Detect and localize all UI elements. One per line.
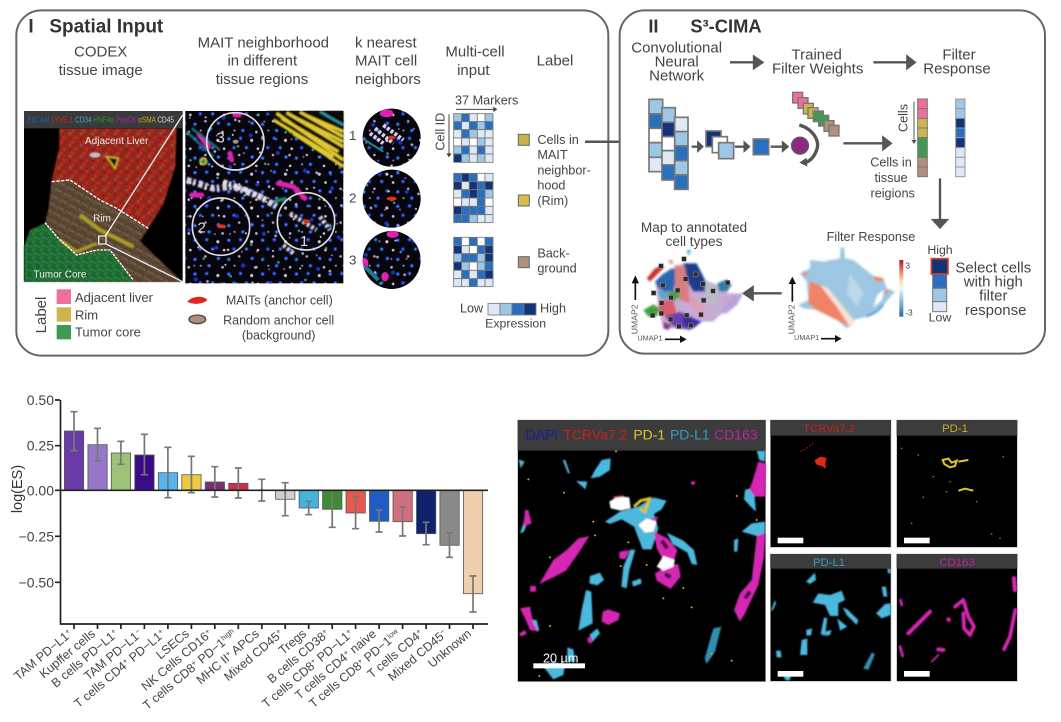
legend: anchor cell: MAITs (anchor cell) [226, 293, 333, 307]
heading: filter response: Filter [942, 47, 976, 64]
x axis category labels: T cells CD4 [71, 659, 129, 711]
legend: region label: Label [33, 297, 50, 333]
x axis category labels: MHC II [194, 652, 232, 687]
expression legend: Expression [485, 316, 546, 330]
high low selection stack [927, 243, 953, 325]
axes [55, 400, 488, 629]
heading: filter response: Response [923, 61, 991, 78]
zoom box and lines [99, 115, 183, 282]
heading: convolutional neural network: Network [649, 68, 705, 85]
x axis category labels: − [133, 626, 142, 636]
cells in tissue regions text: tissue [874, 171, 908, 185]
output square [753, 139, 769, 155]
select cells text: filter [979, 288, 1007, 305]
cells in tissue regions text: reigions [870, 186, 915, 200]
bar chart: log(ES) by cell type [10, 392, 488, 713]
heading: CODEX tissue image: tissue image [59, 62, 143, 79]
cell id axis: Cell ID [434, 113, 448, 151]
x axis category labels: + [203, 626, 212, 636]
PD-1 image: PD-1 [942, 423, 968, 435]
filter response map [798, 230, 915, 328]
neighborhood numbers: 2 [197, 220, 206, 237]
UMAP axes left: UMAP2 [629, 304, 639, 334]
tissue region labels: Tumor Core [34, 269, 87, 280]
UMAP axes right [786, 277, 842, 342]
heading: k nearest neighbors: MAIT cell [355, 53, 417, 70]
merged header [518, 420, 766, 451]
high low selection stack: High [927, 243, 953, 257]
output labels: ground [537, 262, 577, 276]
matrix 1 [454, 114, 493, 162]
response column [956, 99, 965, 177]
x axis category labels: + [223, 648, 233, 658]
annotated cell type map [641, 220, 747, 330]
cells in tissue regions text: Cells in [870, 156, 912, 170]
arrow: network to weights [730, 57, 762, 68]
heading: label: Label [537, 53, 573, 70]
legend: region label [33, 289, 154, 339]
cells axis: Cells [896, 104, 910, 132]
neighborhood numbers: 3 [216, 130, 225, 147]
merged channel legend: TCRVa7.2 [563, 426, 628, 442]
neighborhood circles [192, 113, 335, 255]
heading: MAIT neighborhood: tissue regions [216, 71, 308, 88]
neighbor crop 3 [362, 230, 422, 290]
expression legend: High [540, 302, 566, 316]
x axis category labels: low [385, 626, 400, 641]
tissue marker legend: EbCAM LYVE-1 CD34 HNF4α PanCK αSMA CD45 [27, 115, 174, 125]
high low selection stack: Low [929, 311, 951, 325]
white overlaps [609, 496, 675, 571]
heading: trained filter weights: Trained [792, 47, 842, 64]
row numbers: 1 [349, 128, 356, 143]
annotated cell type map: Map to annotated [641, 220, 747, 235]
x axis category labels: T cells CD8 [259, 659, 317, 711]
x axis category labels: LSECs [153, 627, 192, 662]
cells axis [896, 102, 917, 144]
x axis category labels: + [156, 626, 165, 636]
x axis category labels: + [344, 626, 353, 636]
x axis category labels: + [120, 656, 130, 666]
heading: multi-cell input: Multi-cell [445, 44, 505, 61]
heading: MAIT neighborhood: in different [227, 53, 298, 70]
heading: multi-cell input: input [457, 62, 490, 79]
CD163 image [897, 554, 1017, 681]
neighborhood image [185, 111, 343, 283]
select cells text: Select cells [955, 260, 1031, 277]
x axis category labels [11, 626, 474, 713]
panel: S3-CIMA [620, 10, 1045, 354]
arrow: filter to cells [843, 138, 891, 149]
heading: S3-CIMA: II [648, 15, 659, 36]
x axis category labels: Tregs [276, 627, 309, 657]
select cells text: with high [963, 274, 1023, 291]
y axis tick labels: 0.00 [27, 482, 54, 498]
trained filter squares [793, 92, 839, 136]
x axis category labels: + [414, 626, 423, 636]
filter response map: 3 [905, 260, 910, 270]
tissue region labels: Rim [93, 214, 111, 225]
heading: MAIT neighborhood: MAIT neighborhood [198, 34, 329, 51]
TCRVa7.2 image: TCRVa7.2 [803, 423, 855, 435]
merged channel legend: PD-1 [633, 426, 665, 442]
heading: S3-CIMA: S³-CIMA [690, 15, 762, 36]
y axis tick labels: −0.25 [19, 528, 54, 544]
magenta CD163 structures [519, 462, 766, 643]
network layers [649, 99, 688, 189]
annotated cell type map: cell types [666, 234, 723, 249]
UMAP axes left: UMAP1 [637, 334, 663, 343]
x axis category labels: APCs [227, 627, 262, 659]
colorbar [899, 260, 903, 317]
markers axis: 37 Markers [455, 94, 518, 108]
x axis category labels: + [274, 626, 283, 636]
x axis category labels: Mixed CD45 [221, 629, 283, 684]
neighbor crop 1 [362, 108, 422, 168]
matrix 2 [454, 173, 493, 223]
legend: anchor cell: (background) [242, 329, 315, 343]
output labels: MAIT [537, 148, 568, 162]
panel: spatial input [16, 10, 608, 356]
filter response map: -3 [905, 307, 913, 317]
x axis category labels: − [438, 626, 447, 636]
merged scale bar: 20 µm [543, 651, 578, 665]
x axis category labels: naive [345, 627, 379, 659]
TCRVa7.2 image [770, 420, 891, 547]
fluorescence microscopy panels [518, 420, 1017, 682]
x axis category labels: PD−1 [192, 636, 228, 669]
neighborhood numbers: 1 [300, 233, 308, 250]
anchor cells [217, 140, 310, 228]
output labels: Cells in [537, 133, 579, 147]
heading: spatial input: Spatial Input [49, 16, 164, 37]
UMAP axes right: UMAP1 [794, 333, 819, 342]
PD-L1 image [770, 554, 891, 681]
legend: anchor cell [187, 293, 334, 343]
convolution squares [706, 131, 734, 159]
heading: CODEX tissue image: CODEX [74, 44, 127, 61]
output labels: Back- [537, 246, 570, 260]
PD-1 image [897, 420, 1017, 547]
output labels: (Rim) [537, 194, 568, 208]
merged image [518, 420, 766, 682]
dark holes [662, 541, 750, 598]
heading: convolutional neural network: Neural [655, 54, 699, 71]
merged channel legend: CD163 [714, 426, 758, 442]
y axis tick labels: 0.50 [27, 392, 54, 408]
x axis category labels: TAM PD−L1 [81, 629, 142, 683]
merged channel legend: DAPI [526, 426, 558, 442]
x axis category labels: NK Cells CD16 [139, 629, 212, 694]
cluster number tags [650, 257, 730, 329]
x axis category labels: T cells CD4 [365, 629, 423, 681]
heading: k nearest neighbors: k nearest [355, 34, 417, 51]
CD163 image: CD163 [939, 557, 975, 569]
arrow: label to network [585, 135, 641, 148]
x axis category labels: Mixed CD45 [385, 629, 447, 684]
expression legend: Low [460, 302, 484, 316]
legend: anchor cell: Random anchor cell [223, 313, 334, 327]
filter response map: Filter Response [827, 230, 915, 244]
x axis category labels: Kupffer cells [37, 627, 98, 681]
x axis category labels: + [63, 626, 72, 636]
x axis category labels: T cells CD4 [292, 651, 350, 702]
arrows between network stages [692, 141, 789, 153]
x axis category labels: + [308, 656, 318, 666]
heading: spatial input: I [28, 16, 34, 37]
tissue image [24, 111, 183, 282]
x axis category labels: PD−L1 [124, 629, 165, 667]
x axis category labels: + [189, 658, 199, 668]
arrow: response down [933, 178, 947, 227]
matrix 3 [454, 237, 493, 287]
tissue region labels: Adjacent Liver [85, 136, 149, 147]
expression legend [460, 302, 566, 330]
merged channel legend: PD-L1 [670, 426, 710, 442]
heading: convolutional neural network: Convolutional [631, 40, 722, 57]
x axis category labels: B cells CD38 [265, 629, 329, 686]
heading: k nearest neighbors: neighbors [355, 71, 421, 88]
row numbers: 3 [349, 253, 356, 268]
x axis category labels: PD−1 [359, 634, 394, 667]
cell id axis [434, 113, 452, 157]
output labels: neighbor- [537, 163, 591, 177]
x axis category labels: TAM PD−L1 [11, 629, 72, 683]
x axis category labels: + [355, 656, 365, 666]
x axis category labels: T cells CD8 [140, 661, 198, 713]
cells column [918, 99, 927, 177]
neighbor crop 2 [362, 169, 422, 229]
legend: region label: Tumor core [75, 324, 141, 339]
row numbers: 2 [349, 191, 356, 206]
y axis tick labels: −0.50 [19, 574, 54, 590]
y axis title: log(ES) [10, 465, 26, 513]
x axis category labels: PD−L1 [312, 629, 353, 667]
x axis category labels: high [219, 627, 236, 643]
arrow: weights to response [873, 57, 915, 68]
y axis tick labels: 0.25 [27, 438, 54, 454]
output labels: hood [537, 179, 565, 193]
arrow: response map to cell types [744, 287, 782, 299]
heading: trained filter weights: Filter Weights [772, 61, 863, 78]
merged scale bar [533, 651, 585, 668]
x axis category labels: T cells CD8 [306, 659, 364, 711]
scattered PD-1 dots [527, 450, 758, 677]
x axis category labels: B cells PD−L1 [49, 629, 118, 690]
PD-L1 image: PD-L1 [813, 557, 845, 569]
legend: region label: Rim [75, 307, 98, 322]
cyan PD-L1 structures [519, 451, 765, 679]
UMAP axes right: UMAP2 [786, 304, 796, 334]
bars with error bars [64, 431, 483, 594]
legend: region label: Adjacent liver [75, 290, 154, 305]
x axis category labels: Unknown [425, 627, 474, 671]
select cells text: response [965, 302, 1026, 319]
filter circle with rotation arrow [791, 125, 818, 167]
x axis category labels: + [320, 626, 329, 636]
x axis category labels: + [109, 626, 118, 636]
error bars [70, 412, 476, 612]
UMAP axes left [629, 275, 687, 343]
x axis category labels: + [341, 647, 351, 658]
output labels [518, 133, 591, 276]
